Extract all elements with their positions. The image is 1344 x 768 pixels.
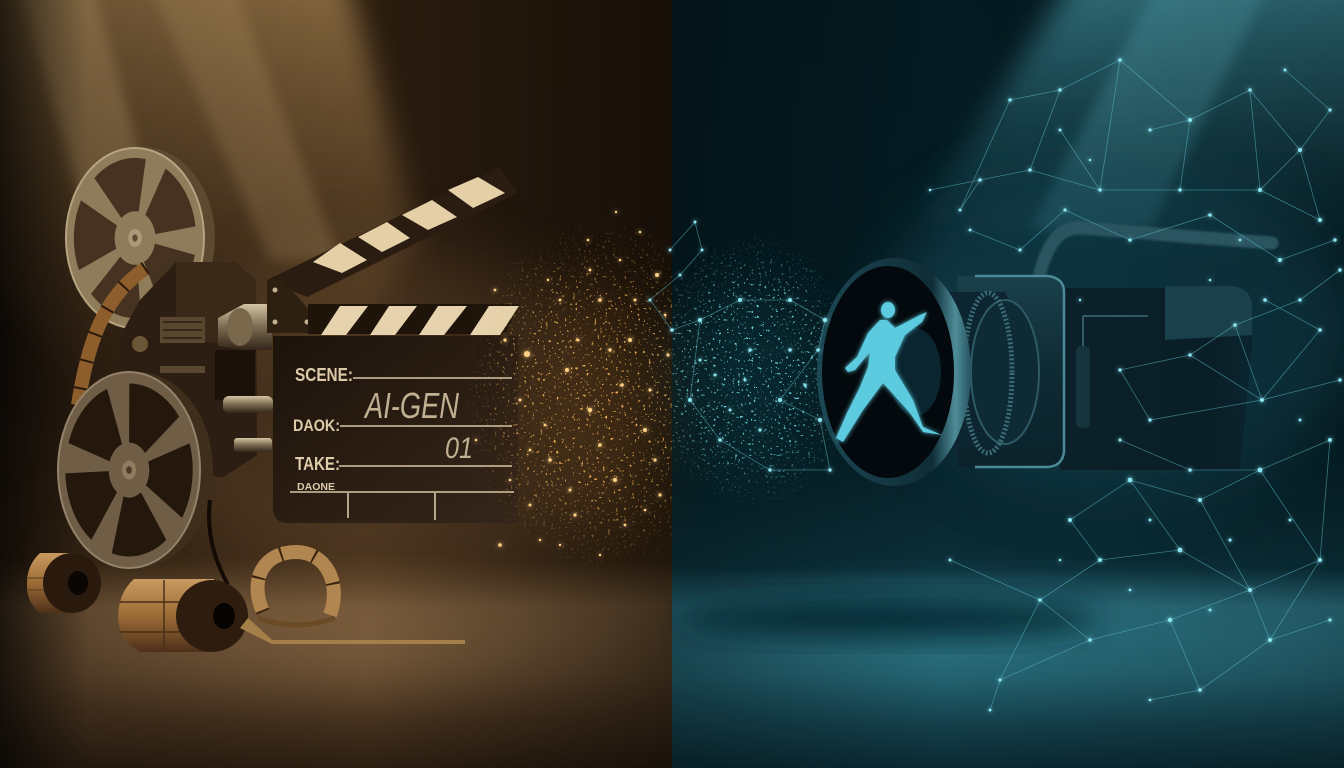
blue particle dissolve	[663, 234, 837, 506]
projector with film reels	[58, 147, 273, 585]
data network: nodes	[648, 58, 1342, 712]
rear section and eyepiece	[1060, 288, 1252, 470]
lower clapstick	[308, 304, 520, 335]
background: warm film half	[0, 0, 672, 768]
upper reel	[66, 147, 215, 329]
stand leg	[209, 500, 228, 585]
digital cinema camera	[817, 228, 1272, 486]
film strip from upper to lower reel	[78, 268, 146, 405]
film loop	[257, 552, 334, 615]
projector body	[118, 262, 273, 478]
gold particle dissolve	[465, 208, 676, 570]
clapperboard	[267, 167, 520, 523]
board text: DAOK:	[293, 416, 340, 435]
glowing human figure	[836, 302, 942, 442]
board	[273, 336, 518, 523]
main body	[957, 276, 1064, 467]
board text: DAONE	[297, 482, 335, 493]
board lines	[290, 378, 514, 520]
lens barrel	[950, 292, 1026, 452]
lens and knobs	[218, 304, 272, 350]
film rolls on floor	[27, 552, 465, 652]
hinge plate	[267, 280, 316, 333]
upper clapstick	[267, 167, 518, 297]
roll: front	[118, 579, 248, 652]
background: digital teal half	[672, 0, 1344, 768]
board text: AI-GEN	[363, 385, 460, 426]
roll: left	[27, 553, 101, 613]
top handle	[1040, 228, 1272, 272]
lens front	[817, 258, 971, 486]
floor film strip	[240, 618, 465, 644]
data network: lines	[650, 60, 1340, 710]
camera floor shadow	[680, 598, 1100, 638]
board text: TAKE:	[295, 454, 340, 474]
lower reel	[58, 372, 213, 568]
board text	[293, 365, 473, 493]
board text: 01	[445, 432, 473, 465]
board text: SCENE:	[295, 365, 353, 385]
